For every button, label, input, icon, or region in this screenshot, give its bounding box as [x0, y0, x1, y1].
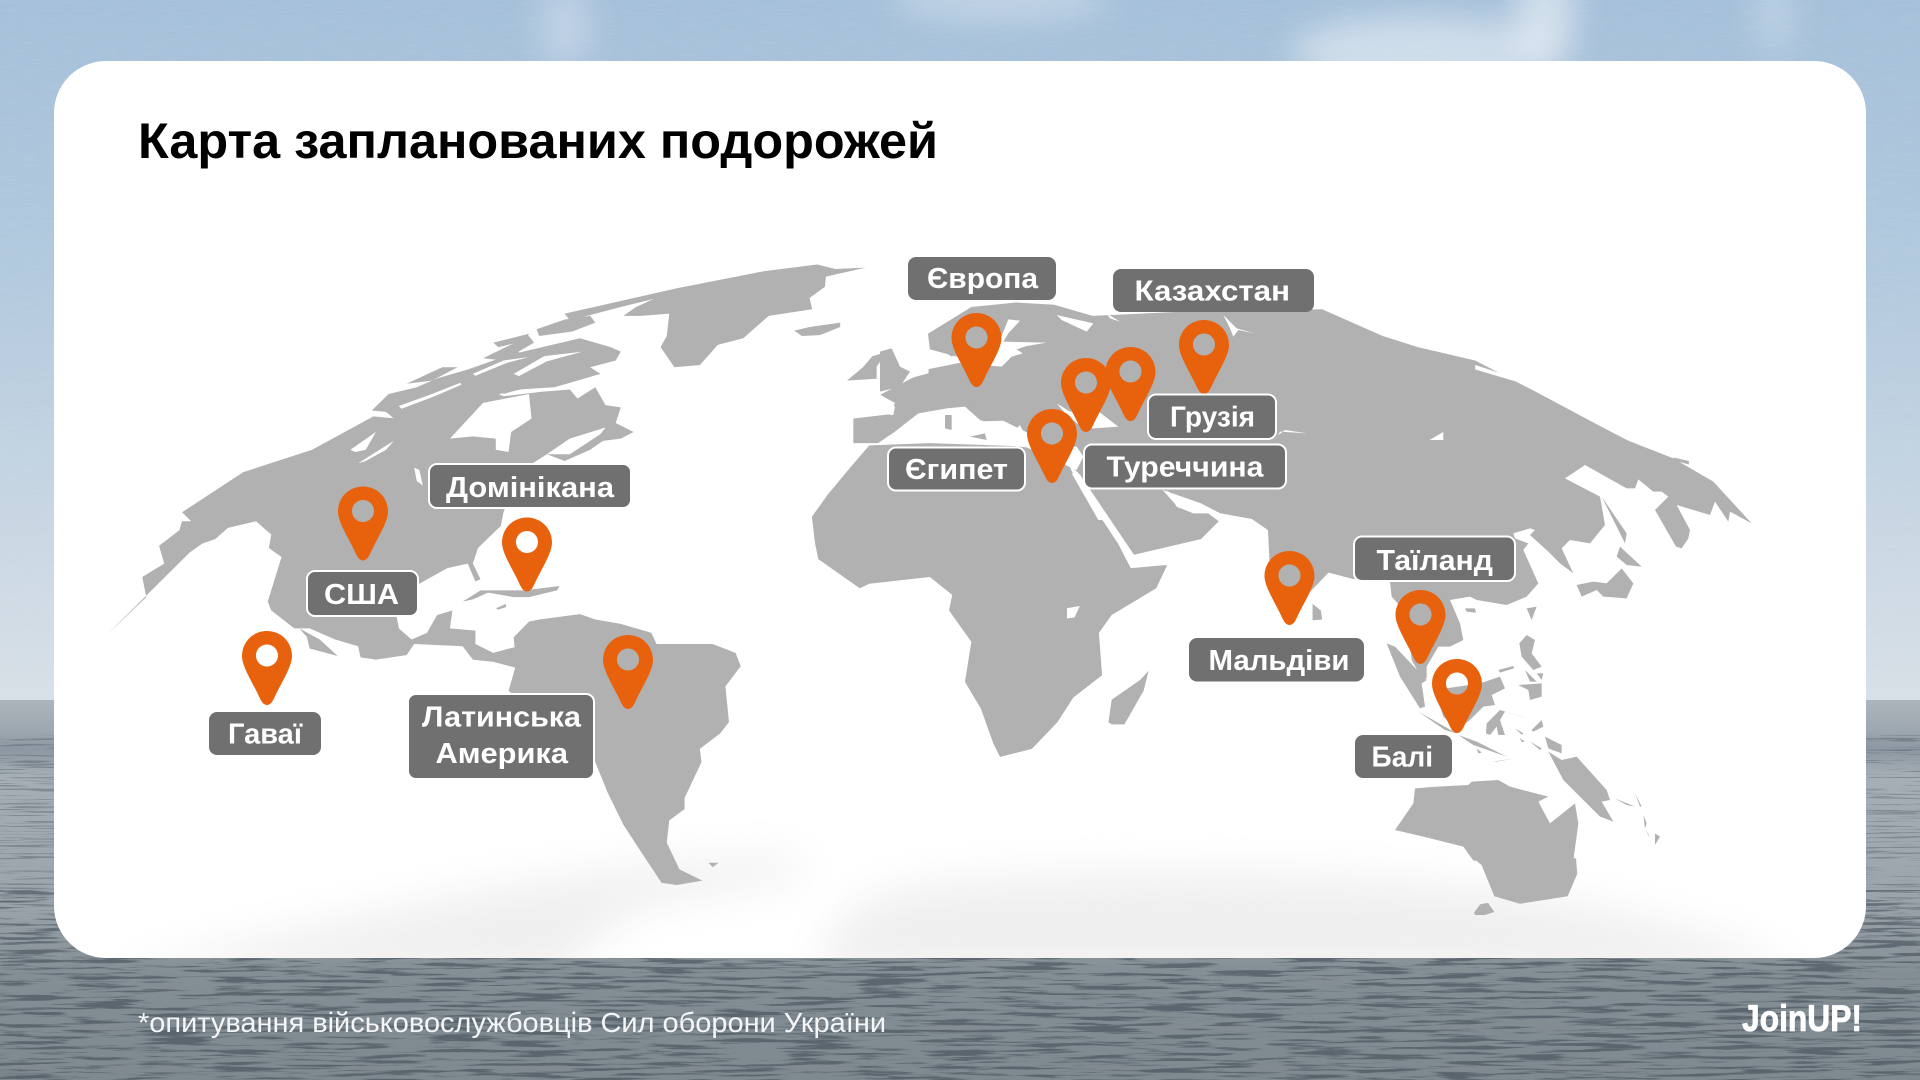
seas: Mediterranean, Baltic, Black Sea, Red Sea, Caspian	[877, 313, 1307, 520]
label: Мальдіви	[1189, 638, 1364, 682]
pin: Казахстан	[1179, 320, 1229, 394]
landmass: Eurasia and Africa	[812, 302, 1689, 757]
title: Карта запланованих подорожей	[138, 113, 938, 169]
label: Єгипет	[888, 448, 1025, 490]
label: Гаваї: Гаваї	[228, 718, 303, 750]
label: Балі: Балі	[1372, 742, 1433, 774]
label: Таїланд	[1354, 536, 1515, 581]
label: Латинська Америка	[408, 694, 594, 779]
label: Грузія: Грузія	[1170, 402, 1255, 434]
footnote: *опитування військовослужбовців Сил оборони України	[138, 1007, 886, 1038]
label: Домінікана	[429, 464, 631, 508]
panel: white map card	[54, 61, 1866, 975]
label: Єгипет: Єгипет	[905, 454, 1008, 486]
landmass: South America	[509, 614, 741, 885]
pin: Мальдіви	[1264, 551, 1314, 625]
label: Мальдіви: Мальдіви	[1208, 645, 1350, 677]
label: США	[307, 571, 418, 616]
pin: Латинська Америка	[603, 635, 653, 709]
label: Грузія	[1148, 394, 1276, 439]
pin: Таїланд	[1396, 590, 1446, 664]
pin: Європа	[952, 313, 1002, 387]
label: Домінікана: Домінікана	[446, 472, 615, 504]
label: Латинська Америка: Америка	[436, 738, 569, 770]
pin: Туреччина	[1061, 358, 1111, 432]
pin: США	[338, 486, 388, 560]
pin: Грузія	[1106, 347, 1156, 421]
landmass: North America and Greenland	[107, 265, 866, 669]
label: Казахстан: Казахстан	[1134, 276, 1290, 308]
pin: Домінікана	[502, 518, 552, 592]
label: Туреччина	[1084, 444, 1286, 488]
label: Латинська Америка: Латинська	[422, 702, 582, 734]
pin: Єгипет	[1027, 409, 1077, 483]
label: Туреччина: Туреччина	[1106, 452, 1264, 484]
logo: JoinUP!: JoinUP!	[1742, 998, 1862, 1039]
label: Казахстан	[1113, 269, 1314, 312]
world map	[107, 265, 1752, 915]
landmass: East Asia, islands and Australia	[1340, 440, 1752, 861]
label: Європа: Європа	[927, 263, 1039, 295]
pin: Балі	[1432, 659, 1482, 733]
label: Гаваї	[209, 712, 321, 755]
label: Балі	[1355, 735, 1452, 778]
label: Таїланд: Таїланд	[1376, 545, 1493, 577]
label: США: США	[324, 579, 399, 611]
label: Європа	[908, 257, 1056, 300]
pin: Гаваї	[242, 631, 292, 705]
